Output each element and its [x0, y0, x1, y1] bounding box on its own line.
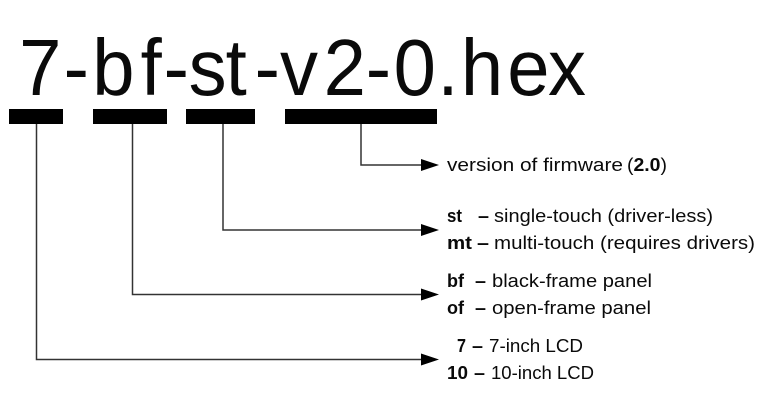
- label: black-frame: –: [475, 271, 486, 291]
- label: single-touch: single-touch (driver-less): [494, 206, 713, 226]
- label: multi-touch: multi-touch (requires drivers): [494, 233, 755, 253]
- label: open-frame: of: [447, 298, 465, 318]
- label: firmware version: (2.0): [627, 155, 667, 175]
- label: open-frame: –: [475, 298, 486, 318]
- label: 7-inch: 7: [457, 336, 466, 356]
- label: single-touch: –: [478, 206, 489, 226]
- label: firmware version: version of firmware: [447, 155, 623, 175]
- label: black-frame: [447, 271, 652, 291]
- segment bars: [9, 109, 437, 124]
- label: 7-inch: –: [472, 336, 483, 356]
- label: 10-inch: –: [474, 363, 485, 383]
- label: single-touch: st: [447, 206, 462, 226]
- arrow: frame type: [132, 124, 439, 300]
- arrow: touch type: [223, 124, 439, 236]
- label: 7-inch: 7-inch LCD: [489, 336, 583, 356]
- arrow: LCD size: [36, 124, 439, 366]
- label: firmware version: [447, 155, 667, 175]
- label: black-frame: bf: [447, 271, 465, 291]
- label: 10-inch: 10: [447, 363, 468, 383]
- label: 10-inch: 10-inch LCD: [491, 363, 594, 383]
- title: filename: 7-bf-st-v2-0.hex: [19, 22, 586, 112]
- label: multi-touch: –: [477, 233, 489, 253]
- label: multi-touch: mt: [447, 233, 472, 253]
- arrow: version: [361, 124, 439, 171]
- label: 10-inch: [447, 363, 594, 383]
- label: open-frame: [447, 298, 651, 318]
- label: open-frame: open-frame panel: [492, 298, 651, 318]
- label: black-frame: black-frame panel: [492, 271, 652, 291]
